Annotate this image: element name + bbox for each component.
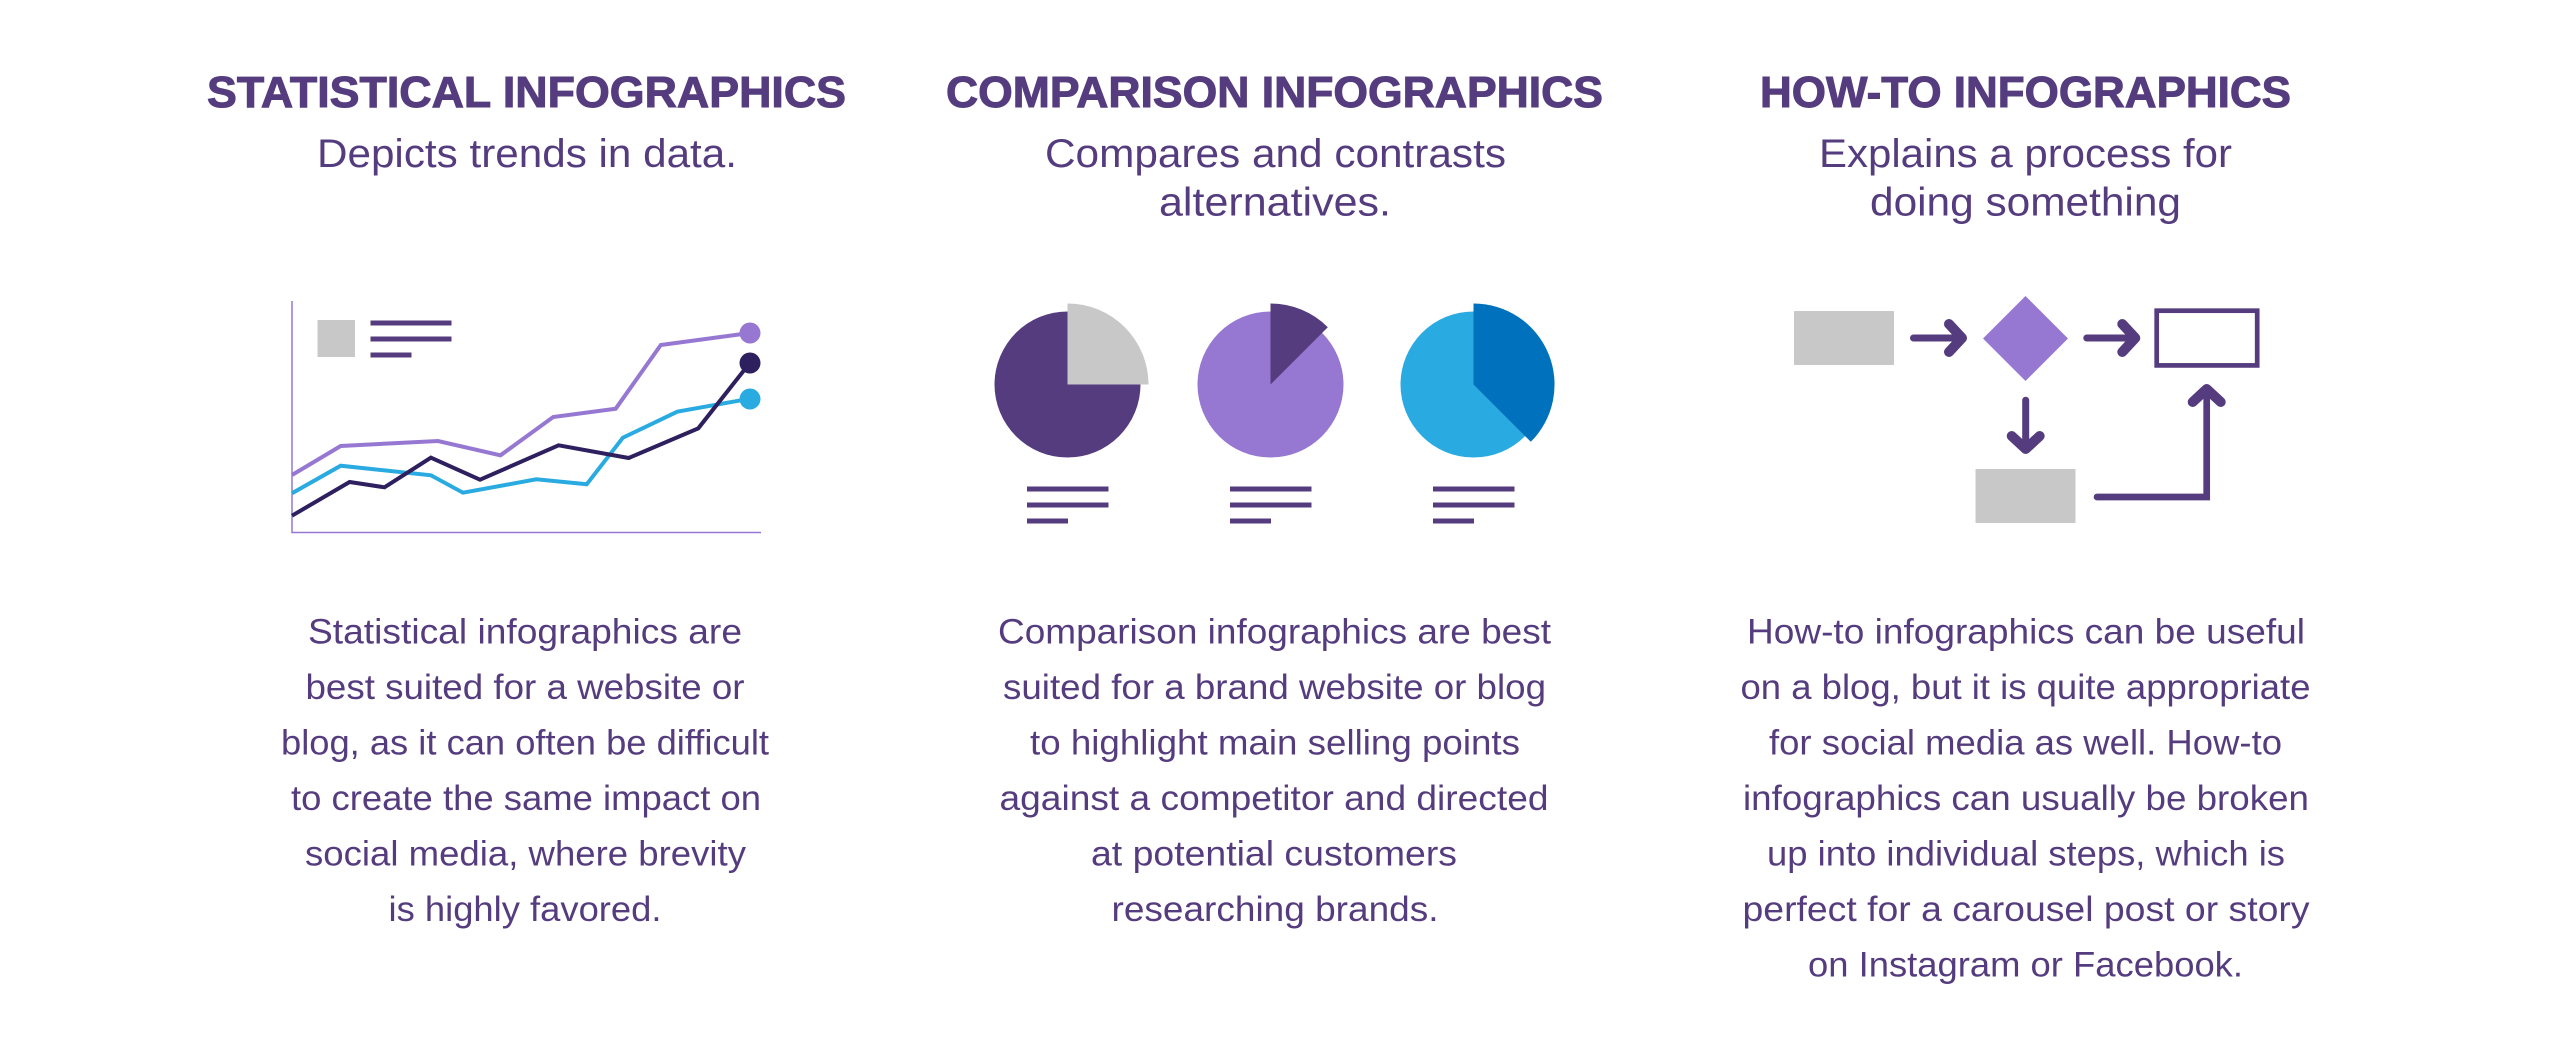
arrow: decision down xyxy=(2012,400,2040,449)
body text: how-to: on a blog, but it is quite appropriate xyxy=(1740,667,2310,707)
heading: comparison infographics: COMPARISON INFOGRAPHICS xyxy=(946,68,1603,117)
body text: comparison: against a competitor and directed xyxy=(1000,778,1548,818)
heading: statistical infographics: STATISTICAL INFOGRAPHICS xyxy=(207,68,846,117)
subheading: comparison: Compares and contrasts xyxy=(1045,132,1506,176)
heading: how-to infographics: HOW-TO INFOGRAPHICS xyxy=(1760,68,2291,117)
subheading: statistical: Depicts trends in data. xyxy=(317,132,737,176)
body text: comparison: suited for a brand website or blog xyxy=(1003,667,1546,707)
flow diamond: decision xyxy=(1983,296,2068,381)
pie 1 xyxy=(994,304,1148,524)
line chart xyxy=(292,301,761,532)
body text: statistical xyxy=(281,612,769,929)
body text: how-to: How-to infographics can be useful xyxy=(1747,612,2305,652)
pie 2 xyxy=(1198,304,1344,524)
arrow: decision to result xyxy=(2087,324,2135,352)
arrow: start to decision xyxy=(1914,324,1962,352)
body text: comparison xyxy=(998,612,1551,929)
pie charts xyxy=(994,304,1555,524)
body text: comparison: Comparison infographics are best xyxy=(998,612,1551,652)
pie 3 xyxy=(1400,304,1555,524)
subheading: how-to xyxy=(1819,132,2232,224)
subheading: how-to: Explains a process for xyxy=(1819,132,2232,176)
series: blue line xyxy=(292,388,760,493)
series: dark line xyxy=(292,352,760,516)
subheading: how-to: doing something xyxy=(1870,180,2181,224)
series: lavender line xyxy=(292,322,760,475)
body text: how-to: up into individual steps, which is xyxy=(1767,834,2285,874)
body text: statistical: Statistical infographics are xyxy=(308,612,742,652)
body text: how-to: perfect for a carousel post or story xyxy=(1742,889,2310,929)
body text: how-to: on Instagram or Facebook. xyxy=(1808,944,2243,984)
body text: how-to xyxy=(1740,612,2310,984)
flow box: start xyxy=(1794,311,1894,365)
body text: comparison: researching brands. xyxy=(1112,889,1438,929)
flow box: alternate step xyxy=(1976,469,2076,523)
subheading: comparison: alternatives. xyxy=(1159,180,1391,224)
body text: statistical: to create the same impact on xyxy=(291,778,761,818)
panel: statistical infographics xyxy=(207,68,846,929)
subheading: comparison xyxy=(1045,132,1506,224)
panel: how-to infographics xyxy=(1740,68,2310,984)
body text: statistical: blog, as it can often be difficult xyxy=(281,722,769,762)
body text: statistical: is highly favored. xyxy=(388,889,662,929)
chart legend xyxy=(318,320,452,358)
body text: statistical: social media, where brevity xyxy=(305,834,746,874)
arrow: elbow to result xyxy=(2097,389,2221,497)
chart axes xyxy=(292,301,761,532)
body text: comparison: at potential customers xyxy=(1091,834,1457,874)
body text: statistical: best suited for a website or xyxy=(306,667,745,707)
body text: how-to: infographics can usually be broken xyxy=(1743,778,2309,818)
flow box: result outline xyxy=(2157,311,2257,365)
flow diagram xyxy=(1794,296,2257,523)
body text: how-to: for social media as well. How-to xyxy=(1769,722,2282,762)
panel: comparison infographics xyxy=(946,68,1603,929)
body text: comparison: to highlight main selling points xyxy=(1030,722,1520,762)
